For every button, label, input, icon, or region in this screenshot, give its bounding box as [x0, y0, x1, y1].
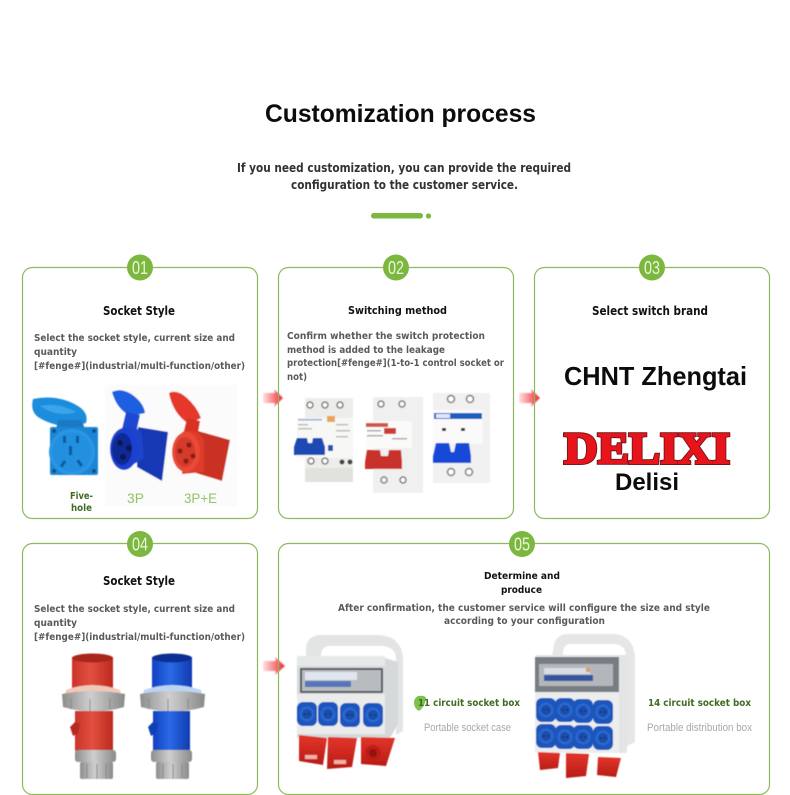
option labels: 3P	[127, 490, 144, 506]
arrow 4 to 5	[263, 657, 285, 675]
title: Customization process	[265, 100, 536, 128]
badge 04: 04	[132, 534, 148, 554]
description: Confirm whether the switch protection	[287, 331, 485, 342]
option labels: Five-	[70, 491, 93, 502]
description: quantity	[34, 347, 77, 358]
description: not)	[287, 372, 307, 383]
heading: Socket Style	[103, 574, 175, 588]
product photo: 11 circuit socket box	[297, 635, 403, 769]
description	[34, 333, 245, 372]
brand logo DELIXI: DELIXI	[564, 424, 730, 473]
arrow 1 to 2	[263, 389, 283, 407]
heading	[484, 571, 560, 596]
brand name Delisi: Delisi	[615, 469, 679, 496]
option labels: 3P+E	[184, 490, 217, 506]
badge 03: 03	[644, 258, 660, 278]
description: according to your configuration	[444, 616, 605, 627]
description: method is added to the leakage	[287, 345, 445, 356]
arrow 2 to 3	[519, 389, 540, 407]
panel: step 5 determine and produce	[278, 531, 770, 794]
badge 04	[127, 531, 153, 557]
option label: 11 circuit box: Portable socket case	[424, 722, 511, 734]
intro text	[237, 161, 571, 192]
description: quantity	[34, 618, 77, 629]
badge 05	[509, 531, 535, 557]
product photo: 14 circuit socket box	[535, 634, 635, 778]
option labels: hole	[71, 503, 92, 514]
option label: 11 circuit box: 11 circuit socket box	[418, 698, 520, 709]
description	[34, 604, 245, 643]
option label: 14 circuit box	[647, 698, 752, 734]
badge 05: 05	[514, 534, 530, 554]
heading: Select switch brand	[592, 304, 708, 318]
badge 01: 01	[132, 258, 148, 278]
intro text: If you need customization, you can provide the required	[237, 161, 571, 175]
panel: step 2 switching method	[278, 254, 514, 518]
product photo: red and blue plugs	[62, 654, 205, 779]
heading: Switching method	[348, 304, 447, 317]
panel: step 1 socket style	[22, 254, 258, 518]
product photo: three sockets	[32, 385, 237, 506]
heading: Determine and	[484, 571, 560, 582]
option label: 11 circuit box	[414, 696, 520, 734]
description: protection[#fenge#](1-to-1 control socket or	[287, 358, 504, 369]
description: After confirmation, the customer service will configure the size and style	[338, 603, 710, 614]
heading: Socket Style	[103, 304, 175, 318]
badge 02	[383, 254, 409, 280]
description: Select the socket style, current size and	[34, 333, 235, 344]
description	[338, 603, 710, 627]
decorative title accent	[371, 213, 431, 219]
option labels	[70, 490, 217, 514]
heading: produce	[501, 585, 542, 596]
badge 03	[639, 254, 665, 280]
panel: step 4 plug style	[22, 531, 258, 794]
brand name CHNT: CHNT Zhengtai	[564, 361, 747, 391]
badge 01	[127, 254, 153, 280]
brand logo DELIXI: DELIXI	[564, 424, 730, 473]
badge 02: 02	[388, 258, 404, 278]
option label: 14 circuit box: 14 circuit socket box	[648, 698, 751, 709]
description: Select the socket style, current size and	[34, 604, 235, 615]
intro text: configuration to the customer service.	[291, 178, 518, 192]
panel: step 3 switch brand	[534, 254, 770, 518]
description	[287, 331, 504, 383]
description: [#fenge#](industrial/multi-function/other)	[34, 361, 245, 372]
description: [#fenge#](industrial/multi-function/other)	[34, 632, 245, 643]
product photo: three breakers	[294, 393, 490, 493]
option label: 14 circuit box: Portable distribution box	[647, 722, 752, 734]
